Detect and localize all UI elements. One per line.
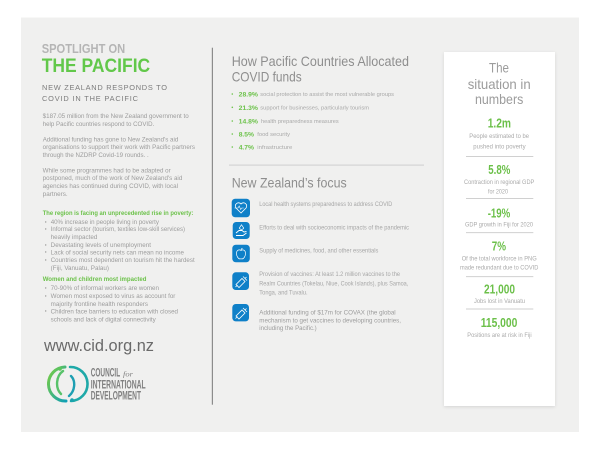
poverty list: Devastating levels of unemployment xyxy=(51,242,151,249)
poverty list: Lack of social security nets can mean no income xyxy=(51,250,185,256)
heading: how Pacific countries allocated funds: How Pacific Countries Allocated xyxy=(232,53,409,69)
poverty list: 40% increase in people living in poverty xyxy=(51,219,160,226)
heading: how Pacific countries allocated funds xyxy=(232,53,409,85)
stat: -19%: GDP growth in Fiji for 2020 xyxy=(465,223,534,229)
stat: 5.8%: 5.8% xyxy=(488,163,510,177)
women and children list: Children face barriers to education with closed xyxy=(51,308,179,316)
icon: apple xyxy=(232,245,250,262)
allocation list: 4.7% xyxy=(239,144,254,152)
poverty list: heavily impacted xyxy=(51,234,98,241)
panel heading: situation in xyxy=(468,76,531,92)
stat: 5.8%: for 2020 xyxy=(488,189,509,195)
poverty list: Informal sector (tourism, textiles low-skill services) xyxy=(51,226,185,233)
stat: 7% xyxy=(460,240,539,272)
stat: 7%: made redundant due to COVID xyxy=(460,266,539,272)
intro text block: postponed, much of the work of New Zealand's aid xyxy=(43,175,183,182)
stat: 1.2m: People estimated to be xyxy=(469,134,530,140)
title: spotlight on the Pacific: SPOTLIGHT ON xyxy=(42,42,125,56)
stat: 21,000: 21,000 xyxy=(484,282,515,296)
stat: 115,000: 115,000 xyxy=(481,316,517,330)
heading: how Pacific countries allocated funds: COVID funds xyxy=(232,69,302,85)
stat: -19%: -19% xyxy=(488,206,510,220)
website URL: www.cid.org.nz xyxy=(43,337,154,355)
icon: syringe xyxy=(232,304,249,321)
focus item: COVAX funding: Additional funding of $17m for COVAX (the global xyxy=(259,310,396,317)
stat: -19% xyxy=(465,206,534,229)
stat: 115,000 xyxy=(467,316,532,339)
stat: 1.2m xyxy=(469,117,530,150)
intro text block: agencies has continued during COVID, with local xyxy=(43,183,178,190)
logo: Council for International Development: for xyxy=(123,370,133,379)
intro text block: through the NZDRP Covid-19 rounds. . xyxy=(43,152,149,159)
logo: Council for International Development: DEVELOPMENT xyxy=(91,390,141,402)
poverty list: The region is facing an unprecedented rise in poverty: xyxy=(43,210,193,217)
women and children list xyxy=(43,276,179,323)
allocation list: 28.9% xyxy=(239,92,258,98)
icon: hand with coins xyxy=(233,222,250,239)
focus item: supplies: Supply of medicines, food, and other essentials xyxy=(259,249,378,255)
allocation list xyxy=(232,92,394,152)
stat: 21,000 xyxy=(474,282,525,305)
focus item: socioeconomic impacts: Efforts to deal with socioeconomic impacts of the pandemic xyxy=(259,225,409,231)
intro text block: While some programmes had to be adapted or xyxy=(43,167,171,174)
allocation list: 8.5% xyxy=(239,132,254,138)
stat: 5.8%: Contraction in regional GDP xyxy=(464,180,534,186)
allocation list: 14.8% xyxy=(239,118,258,126)
title: spotlight on the Pacific xyxy=(42,42,150,77)
logo: Council for International Development: COUNCIL xyxy=(91,368,120,380)
poverty list: Countries most dependent on tourism hit the hardest xyxy=(51,257,195,264)
icon: heart with pulse xyxy=(232,199,250,217)
women and children list: majority frontline health responders xyxy=(51,301,148,308)
poverty list: (Fiji, Vanuatu, Palau) xyxy=(51,265,109,272)
stat: 21,000: Jobs lost in Vanuatu xyxy=(474,299,525,305)
logo: Council for International Development: INTERNATIONAL xyxy=(91,379,146,391)
women and children list: Women and children most impacted xyxy=(43,276,146,283)
stat: 1.2m: 1.2m xyxy=(488,117,511,131)
intro text block: $187.05 million from the New Zealand government to xyxy=(43,113,189,120)
focus item: vaccines: Tonga, and Tuvalu. xyxy=(259,290,308,296)
icon: syringe xyxy=(232,272,249,290)
focus item: health systems: Local health systems preparedness to address COVID xyxy=(259,202,393,208)
subtitle xyxy=(42,83,167,103)
intro text block: organisations to support their work with Pacific partners xyxy=(43,144,195,151)
allocation list: food security xyxy=(257,132,290,138)
heading: New Zealand's focus: New Zealand’s focus xyxy=(232,174,347,190)
allocation list: health preparedness measures xyxy=(261,119,339,125)
focus item: vaccines xyxy=(259,272,409,296)
allocation list: 21.3% xyxy=(239,105,258,112)
stat: 1.2m: pushed into poverty xyxy=(473,144,526,150)
intro text block: help Pacific countries respond to COVID. xyxy=(43,121,155,128)
subtitle: NEW ZEALAND RESPONDS TO xyxy=(42,83,167,92)
vertical divider xyxy=(212,48,213,405)
allocation list: social protection to assist the most vulnerable groups xyxy=(260,92,394,98)
panel heading: numbers xyxy=(475,91,523,107)
poverty list xyxy=(43,210,195,272)
intro text block: partners. xyxy=(43,191,68,198)
intro text block: Additional funding has gone to New Zealand's aid xyxy=(43,136,179,143)
subtitle: COVID IN THE PACIFIC xyxy=(42,94,139,103)
panel heading xyxy=(468,60,531,107)
logo: Council for International Development xyxy=(48,367,146,402)
women and children list: 70-90% of informal workers are women xyxy=(51,285,160,292)
focus item: vaccines: Provision of vaccines: At least 1.2 million vaccines to the xyxy=(259,272,401,278)
panel heading: The xyxy=(489,60,509,76)
women and children list: schools and lack of digital connectivity xyxy=(51,316,157,323)
stat: 115,000: Positions are at risk in Fiji xyxy=(467,333,532,339)
stat: 7%: Of the total workforce in PNG xyxy=(462,257,537,263)
women and children list: Women most exposed to virus as account for xyxy=(51,293,175,300)
panel: the situation in numbers xyxy=(444,52,555,407)
allocation list: infrastructure xyxy=(257,145,292,151)
allocation list: support for businesses, particularly tourism xyxy=(260,106,369,112)
focus item: COVAX funding xyxy=(259,310,401,332)
focus item: COVAX funding: including the Pacific.) xyxy=(259,325,317,332)
stat: 5.8% xyxy=(464,163,534,195)
focus item: vaccines: Realm Countries (Tokelau, Niue, Cook Islands), plus Samoa, xyxy=(259,281,409,287)
title: spotlight on the Pacific: THE PACIFIC xyxy=(42,56,150,77)
focus item: COVAX funding: mechanism to get vaccines to developing countries, xyxy=(259,318,401,324)
intro text block xyxy=(43,113,195,198)
stat: 7%: 7% xyxy=(492,240,506,254)
